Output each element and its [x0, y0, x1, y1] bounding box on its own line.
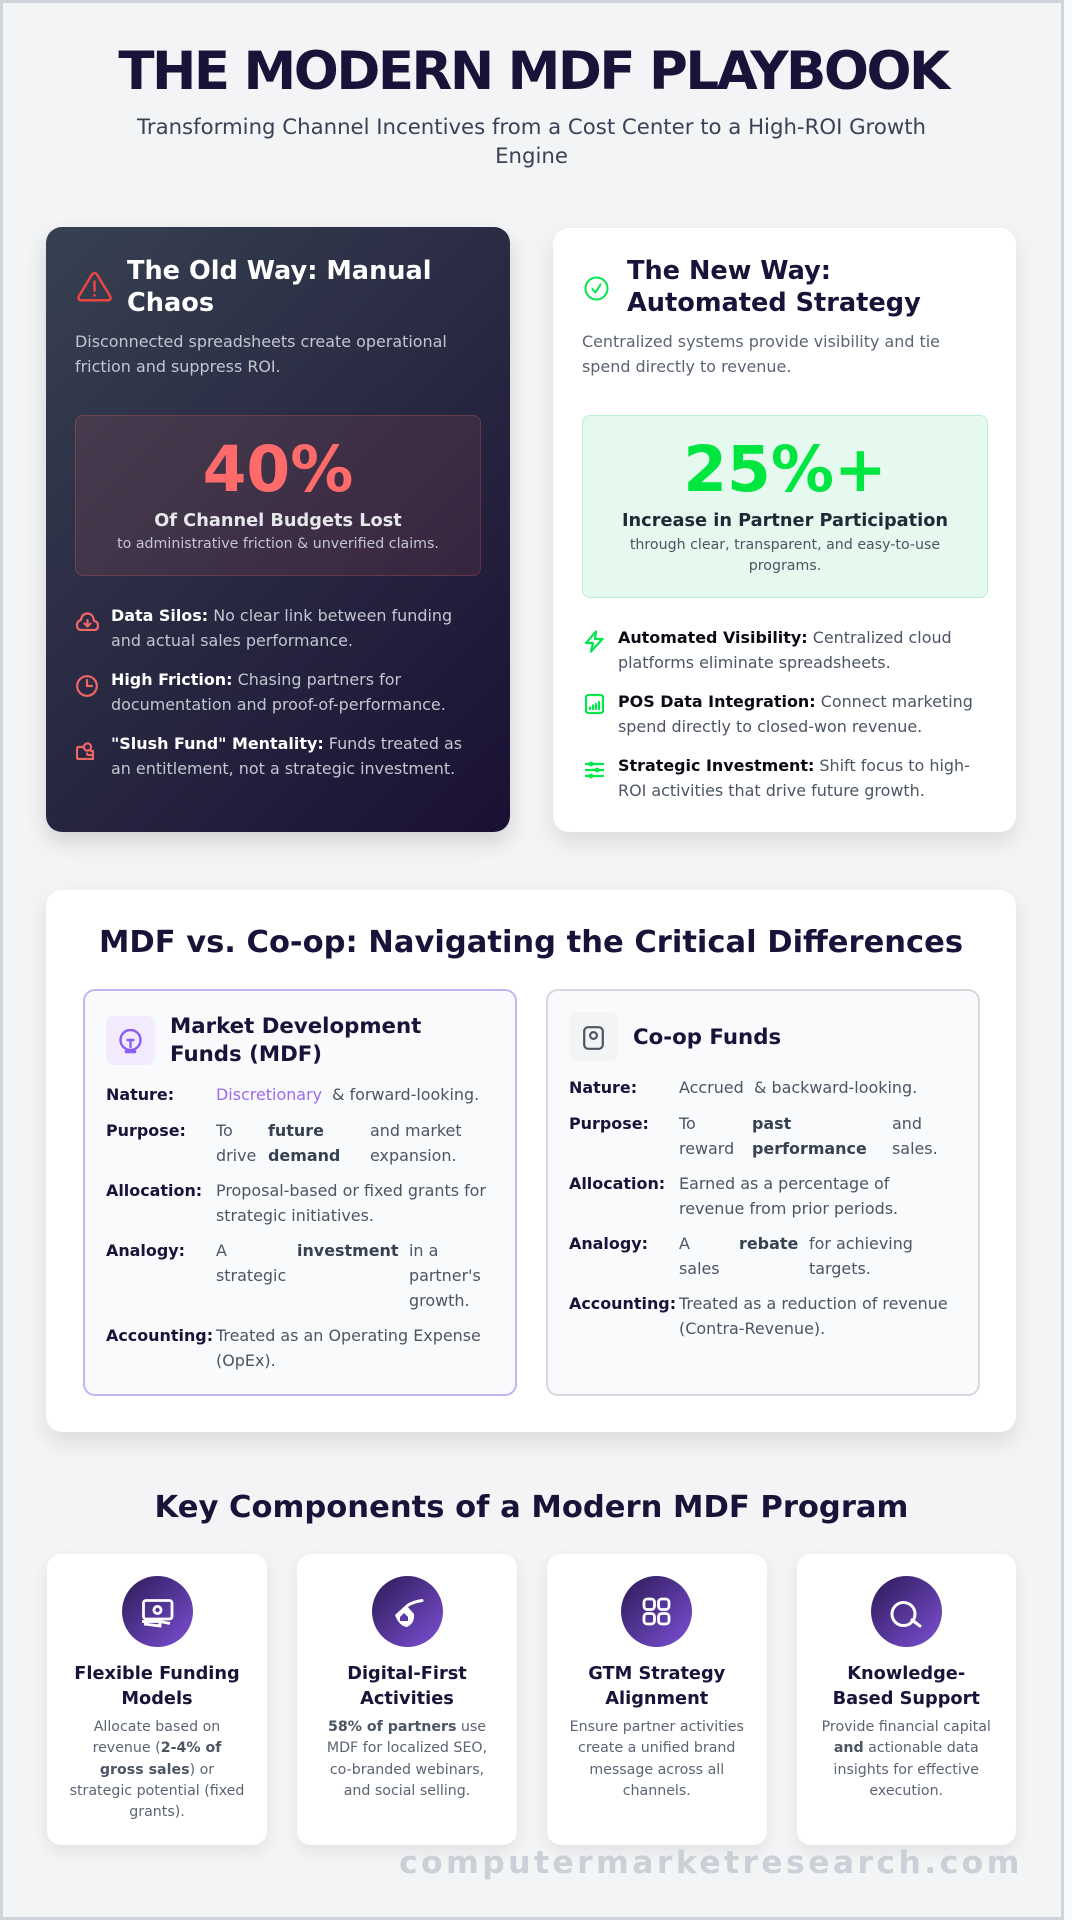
- text: High Friction: Chasing partners for: [111, 670, 401, 689]
- row: purpose: and market: [370, 1120, 462, 1140]
- text: new way description: [582, 332, 940, 376]
- icon: magnifier: [871, 1576, 942, 1646]
- row: analogy: A: [216, 1240, 227, 1260]
- card: knowledge-based: [796, 1554, 1016, 1845]
- heading: mdf: [170, 1014, 421, 1067]
- text: old way description: Disconnected spreadsheets create operational: [75, 332, 447, 351]
- card title: [547, 1662, 766, 1712]
- card text: execution.: [869, 1783, 943, 1799]
- card text: and actionable data: [834, 1740, 979, 1756]
- card text: co-branded webinars,: [330, 1762, 484, 1778]
- panel: co-op funds: (Contra-Revenue).: [679, 1318, 825, 1338]
- heading: the old way: The Old Way: Manual: [127, 256, 432, 286]
- stat note: programs.: [749, 558, 821, 574]
- row: purpose: [569, 1114, 938, 1158]
- icon: grid: [621, 1576, 692, 1646]
- icon: clock: [76, 675, 98, 697]
- heading: key components: Key Components of a Modern MDF Program: [155, 1490, 908, 1525]
- card title: [347, 1664, 467, 1708]
- card title: [796, 1662, 1016, 1712]
- row: allocation: Allocation:: [106, 1180, 202, 1200]
- row: nature: Accrued: [679, 1078, 744, 1096]
- text: platforms eliminate spreadsheets.: [618, 653, 891, 672]
- heading: comparison: MDF vs. Co-op: Navigating the Critical Differences: [99, 925, 963, 960]
- bullet: high friction: [76, 670, 446, 714]
- stat note: [630, 537, 940, 574]
- row: purpose: Purpose:: [106, 1120, 186, 1140]
- row: analogy: investment: [297, 1240, 398, 1260]
- card text: create a unified brand: [578, 1740, 735, 1756]
- row: analogy: Analogy:: [106, 1240, 185, 1260]
- stat number: 40%: [203, 433, 353, 506]
- text: [618, 628, 952, 672]
- text: ROI activities that drive future growth.: [618, 781, 925, 800]
- card text: Ensure partner activities: [570, 1719, 744, 1735]
- subtitle: Transforming Channel Incentives from a Cost Center to a High-ROI Growth: [137, 115, 926, 140]
- icon: wallet: [76, 742, 94, 760]
- card text: revenue (2-4% of: [93, 1740, 221, 1756]
- subtitle: Engine: [495, 144, 568, 169]
- row: purpose: and: [892, 1114, 922, 1132]
- panel: market development funds: (OpEx).: [216, 1350, 276, 1370]
- icon: lightning: [584, 630, 604, 653]
- text: [618, 756, 970, 800]
- card title: [74, 1664, 240, 1708]
- heading: the new way: Automated Strategy: [627, 288, 921, 318]
- row: purpose: past: [752, 1114, 791, 1132]
- icon: safe: [569, 1012, 618, 1061]
- row: purpose: future: [268, 1120, 324, 1140]
- row: purpose: Purpose:: [569, 1114, 649, 1132]
- card title: Alignment: [605, 1688, 708, 1708]
- card: digital-first: [297, 1554, 517, 1845]
- subtitle: [136, 115, 926, 169]
- panel: co-op funds: revenue from prior periods.: [679, 1198, 898, 1218]
- heading: mdf: Market Development: [170, 1014, 421, 1039]
- card text: gross sales) or: [100, 1762, 214, 1778]
- row: allocation: Earned as a percentage of: [679, 1174, 889, 1192]
- row: purpose: [106, 1120, 462, 1164]
- card title: Models: [121, 1688, 193, 1708]
- text: [111, 670, 446, 714]
- card text: [70, 1719, 244, 1820]
- text: documentation and proof-of-performance.: [111, 695, 446, 714]
- row: analogy: [569, 1234, 913, 1278]
- icon: chart box: [585, 694, 604, 714]
- watermark: computermarketresearch.com: [399, 1845, 1023, 1881]
- card text: [796, 1717, 1016, 1802]
- row: analogy: in a: [409, 1240, 438, 1260]
- card text: Allocate based on: [94, 1719, 220, 1735]
- row: allocation: [106, 1180, 486, 1224]
- panel: market development funds: growth.: [409, 1290, 470, 1310]
- card text: insights for effective: [834, 1762, 979, 1778]
- panel: market development funds: strategic: [216, 1266, 286, 1284]
- panel: market development funds: demand: [268, 1146, 340, 1164]
- heading: the old way: [127, 256, 432, 318]
- text: Automated Visibility: Centralized cloud: [618, 628, 952, 647]
- stat heading: Of Channel Budgets Lost: [154, 511, 402, 531]
- card text: Provide financial capital: [822, 1719, 991, 1735]
- icon: warning triangle: [77, 272, 112, 302]
- row: analogy: Analogy:: [569, 1234, 648, 1252]
- panel: market development funds: partner's: [409, 1266, 481, 1284]
- row: accounting: [569, 1294, 948, 1338]
- bullet: strategic investment: [585, 756, 970, 800]
- row: nature: & backward-looking.: [754, 1078, 917, 1096]
- icon: cloud download: [76, 612, 99, 631]
- row: nature: [106, 1084, 479, 1104]
- card text: 58% of partners use: [328, 1719, 486, 1735]
- icon: money: [122, 1576, 192, 1646]
- row: allocation: Proposal-based or fixed grants for: [216, 1180, 486, 1200]
- row: nature: Nature:: [106, 1084, 174, 1104]
- card title: Based Support: [833, 1688, 980, 1708]
- text: "Slush Fund" Mentality: Funds treated as: [111, 734, 462, 753]
- icon: light bulb: [106, 1016, 155, 1065]
- card title: Digital-First: [347, 1664, 467, 1684]
- row: nature: [569, 1078, 917, 1096]
- card text: channels.: [623, 1783, 691, 1799]
- text: old way description: friction and suppress ROI.: [75, 357, 281, 376]
- bullet: pos data: [585, 692, 973, 736]
- text: new way description: spend directly to revenue.: [582, 357, 791, 376]
- callout: 25%+ increase: [582, 415, 988, 598]
- card title: Activities: [360, 1688, 454, 1708]
- card text: [547, 1717, 766, 1802]
- row: nature: Nature:: [569, 1078, 637, 1096]
- card text: strategic potential (fixed: [70, 1783, 244, 1799]
- panel: mdf vs co-op comparison: [46, 890, 1016, 1432]
- heading: the old way: Chaos: [127, 288, 214, 318]
- card title: Knowledge-: [847, 1664, 965, 1684]
- text: spend directly to closed-won revenue.: [618, 717, 922, 736]
- row: accounting: Treated as an Operating Expense: [216, 1326, 481, 1344]
- panel: the new way: [553, 228, 1016, 832]
- title: THE MODERN MDF PLAYBOOK: [118, 41, 948, 102]
- panel: co-op funds: targets.: [809, 1258, 871, 1278]
- row: analogy: A: [679, 1234, 690, 1252]
- row: purpose: To: [679, 1114, 696, 1132]
- icon: check circle: [584, 276, 608, 300]
- heading: co-op: Co-op Funds: [633, 1025, 781, 1050]
- text: POS Data Integration: Connect marketing: [618, 692, 973, 711]
- text: Strategic Investment: Shift focus to high-: [618, 756, 970, 775]
- card text: message across all: [589, 1762, 724, 1778]
- text: [111, 606, 452, 650]
- text: [111, 734, 462, 778]
- panel: market development funds: expansion.: [370, 1146, 457, 1164]
- panel: the old way: [46, 227, 510, 832]
- text: and actual sales performance.: [111, 631, 353, 650]
- row: analogy: for achieving: [809, 1234, 913, 1252]
- icon: sliders: [585, 762, 604, 778]
- row: accounting: Treated as a reduction of revenue: [679, 1294, 948, 1312]
- row: nature: & forward-looking.: [332, 1084, 479, 1104]
- panel: co-op funds: reward: [679, 1138, 734, 1158]
- panel: market development funds: drive: [216, 1146, 256, 1164]
- row: accounting: Accounting:: [569, 1294, 676, 1312]
- heading: the new way: [627, 256, 921, 318]
- panel: co-op funds: performance: [752, 1138, 867, 1158]
- card text: grants).: [129, 1804, 185, 1820]
- icon: brush: [372, 1576, 442, 1646]
- card text: and social selling.: [344, 1783, 470, 1799]
- card title: Flexible Funding: [74, 1664, 240, 1684]
- stat heading: Increase in Partner Participation: [622, 511, 948, 531]
- card text: MDF for localized SEO,: [327, 1740, 487, 1756]
- bullet: slush fund: [76, 734, 462, 778]
- text: old way description: [75, 332, 447, 376]
- panel: market development funds: strategic initiatives.: [216, 1206, 374, 1224]
- row: nature: Discretionary: [216, 1084, 322, 1104]
- text: [618, 692, 973, 736]
- row: accounting: Accounting:: [106, 1326, 213, 1344]
- callout: 40% lost: [75, 415, 481, 576]
- row: analogy: rebate: [739, 1234, 798, 1252]
- text: Data Silos: No clear link between funding: [111, 606, 452, 625]
- stat note: through clear, transparent, and easy-to-use: [630, 537, 940, 553]
- stat number: 25%+: [683, 433, 887, 506]
- row: allocation: Allocation:: [569, 1174, 665, 1192]
- bullet: data silos: [76, 606, 452, 650]
- text: new way description: Centralized systems provide visibility and tie: [582, 332, 940, 351]
- bullet: automated visibility: [584, 628, 952, 672]
- row: accounting: [106, 1326, 481, 1370]
- row: allocation: [569, 1174, 898, 1218]
- heading: the new way: The New Way:: [627, 256, 831, 286]
- panel: co-op funds: sales.: [892, 1138, 938, 1158]
- row: analogy: [106, 1240, 481, 1310]
- card: gtm strategy: [547, 1554, 766, 1845]
- panel: co-op funds: [546, 989, 980, 1396]
- card title: GTM Strategy: [588, 1664, 725, 1684]
- panel: market development funds: [83, 989, 517, 1396]
- heading: mdf: Funds (MDF): [170, 1042, 322, 1067]
- row: purpose: To: [216, 1120, 233, 1140]
- stat note: to administrative friction & unverified claims.: [117, 536, 439, 552]
- card text: [297, 1717, 517, 1802]
- card: flexible funding: [47, 1554, 267, 1845]
- panel: co-op funds: sales: [679, 1258, 720, 1278]
- text: an entitlement, not a strategic investment.: [111, 759, 455, 778]
